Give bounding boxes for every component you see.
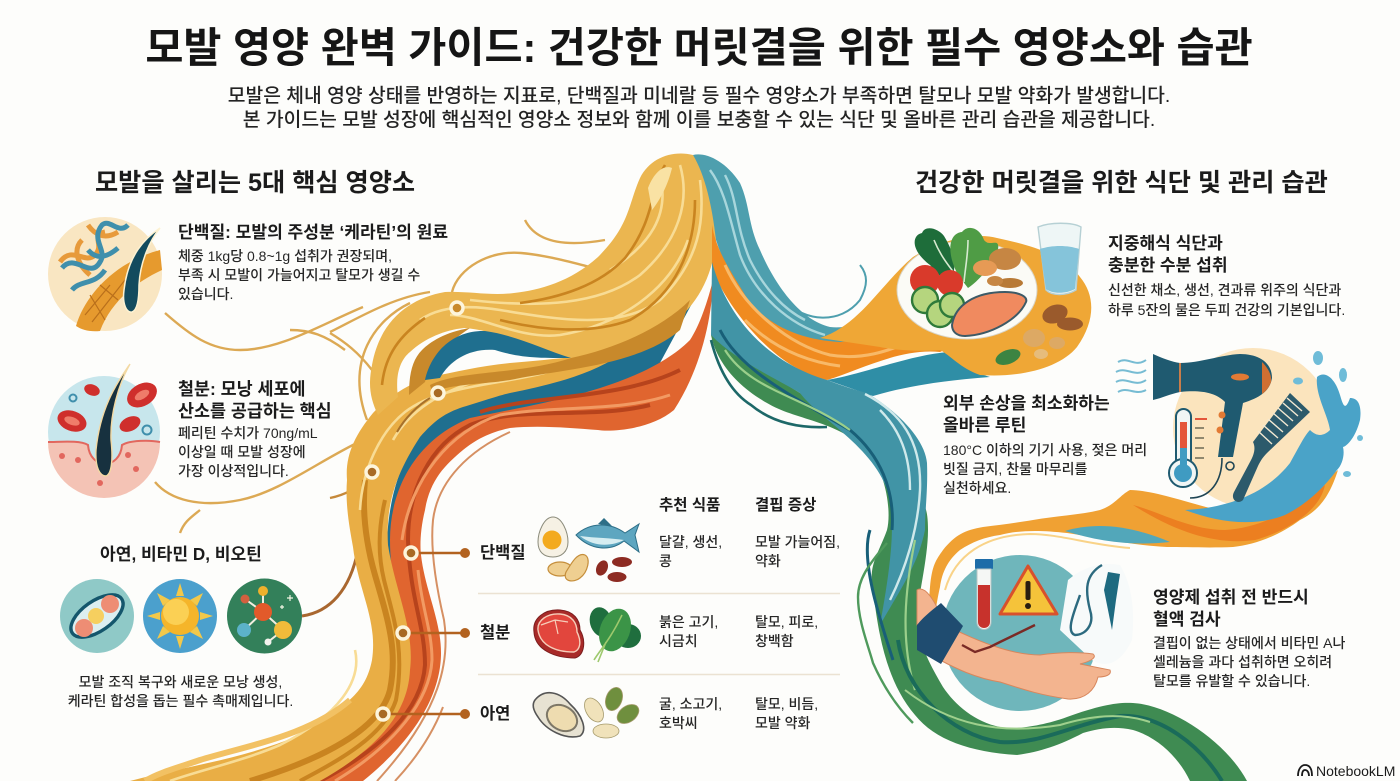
- icon: sun for vitamin D: [143, 579, 217, 653]
- table column heading: recommended foods: 추천 식품: [659, 497, 720, 514]
- zinc foods: 굴, 소고기,: [659, 696, 722, 712]
- blood test text block: [1153, 588, 1345, 689]
- icon: oyster: [533, 693, 584, 737]
- zinc, vitamin D, biotin text: [68, 674, 293, 709]
- icon: spinach: [586, 604, 641, 662]
- iron text block: 가장 이상적입니다.: [178, 463, 289, 479]
- iron text block: 페리틴 수치가 70ng/mL: [178, 425, 318, 441]
- protein foods: 달걀, 생선,: [659, 534, 722, 550]
- diet text block: 지중해식 식단과: [1108, 234, 1223, 253]
- iron foods: [659, 614, 718, 649]
- zinc, vitamin D, biotin text: 케라틴 합성을 돕는 필수 촉매제입니다.: [68, 693, 293, 709]
- iron text block: 이상일 때 모발 성장에: [178, 444, 306, 460]
- zinc symptoms: [755, 696, 818, 731]
- zinc, vitamin D, biotin text: 모발 조직 복구와 새로운 모낭 생성,: [79, 674, 282, 690]
- doctor coat: [1060, 564, 1133, 664]
- dryer: [1153, 354, 1272, 457]
- table dividers: [478, 594, 840, 674]
- cuff: [917, 603, 963, 664]
- illustration: hair dryer background circle: [1173, 348, 1333, 508]
- hair illustration: left golden and orange strands: [130, 154, 716, 781]
- icon: keratin and hair shaft: [48, 217, 162, 331]
- iron symptoms: [755, 614, 818, 649]
- care routine text block: [943, 394, 1147, 496]
- plate: [897, 241, 1037, 339]
- protein text block: 체중 1kg당 0.8~1g 섭취가 권장되며,: [178, 248, 392, 264]
- zinc symptoms: 탈모, 비듬,: [755, 696, 818, 712]
- iron symptoms: 탈모, 피로,: [755, 614, 818, 630]
- hair band arching over blood test icon: [928, 470, 1338, 612]
- care routine text block: 외부 손상을 최소화하는: [943, 394, 1110, 413]
- cucumbers: [912, 287, 964, 327]
- right section heading: 건강한 머릿결을 위한 식단 및 관리 습관: [915, 169, 1328, 197]
- iron foods: 시금치: [659, 633, 698, 649]
- scattered nuts: [993, 301, 1083, 368]
- icon: red meat: [534, 610, 584, 658]
- blood test text block: 셀레늄을 과다 섭취하면 오히려: [1153, 654, 1332, 670]
- care routine text block: 180°C 이하의 기기 사용, 젖은 머리: [943, 442, 1147, 458]
- water drops: [1293, 351, 1363, 477]
- intro text: 모발은 체내 영양 상태를 반영하는 지표로, 단백질과 미네랄 등 필수 영양소가 부족하면 탈모나 모발 약화가 발생합니다.: [228, 86, 1170, 107]
- iron foods: 붉은 고기,: [659, 614, 718, 630]
- warning triangle: [1000, 566, 1057, 614]
- NotebookLM wordmark: NotebookLM: [1316, 763, 1395, 779]
- protein foods: 콩: [659, 553, 672, 569]
- left section heading: 모발을 살리는 5대 핵심 영양소: [95, 169, 415, 197]
- icon: mitochondria for zinc: [60, 579, 134, 653]
- hair illustration: right teal, orange and green strands: [693, 154, 1247, 781]
- icon: pumpkin seeds: [581, 685, 642, 738]
- icon: egg: [538, 517, 568, 557]
- protein text block: 단백질: 모발의 주성분 ‘케라틴’의 원료: [178, 223, 448, 242]
- protein symptoms: 약화: [755, 553, 781, 569]
- zinc, vitamin D, biotin heading: 아연, 비타민 D, 비오틴: [100, 545, 262, 564]
- table column heading: deficiency symptoms: 결핍 증상: [755, 497, 816, 514]
- air lines: [1116, 360, 1146, 392]
- care routine text block: 실천하세요.: [943, 480, 1011, 496]
- table row label: zinc: 아연: [480, 705, 510, 723]
- protein text block: 있습니다.: [178, 286, 233, 302]
- table row label: protein: 단백질: [480, 544, 526, 562]
- blood test text block: 혈액 검사: [1153, 610, 1221, 629]
- protein text block: [178, 223, 448, 302]
- blood test text block: 탈모를 유발할 수 있습니다.: [1153, 673, 1310, 689]
- icon: beans: [594, 557, 632, 582]
- illustration: blood test with arm, warning sign and doctor: [917, 555, 1133, 711]
- intro text: 본 가이드는 모발 성장에 핵심적인 영양소 정보와 함께 이를 보충할 수 있는 식단 및 올바른 관리 습관을 제공합니다.: [243, 110, 1155, 131]
- illustration: hair dryer, thermometer, comb and water: [1116, 351, 1363, 522]
- diet text block: 충분한 수분 섭취: [1108, 256, 1228, 275]
- leafy greens: [915, 228, 998, 288]
- care routine text block: 올바른 루틴: [943, 416, 1026, 435]
- icon: peanuts: [548, 554, 588, 581]
- salmon: [952, 292, 1026, 336]
- syringe: [962, 625, 1035, 652]
- NotebookLM logo mark: [1298, 765, 1312, 776]
- illustration: Mediterranean meal plate and water: [897, 223, 1083, 368]
- node markers on hair: [366, 302, 470, 720]
- table row label: iron: 철분: [480, 624, 510, 642]
- protein foods: [659, 534, 722, 569]
- icon: blood cells and hair follicle: [48, 364, 161, 498]
- water splash: [1185, 374, 1361, 522]
- arm: [917, 589, 1110, 699]
- diet text block: 신선한 채소, 생선, 견과류 위주의 식단과: [1108, 282, 1341, 298]
- glass of water: [1038, 223, 1081, 294]
- care routine text block: 빗질 금지, 찬물 마무리를: [943, 461, 1087, 477]
- comb: [1233, 393, 1310, 502]
- zinc foods: [659, 696, 722, 731]
- blood test text block: 결핍이 없는 상태에서 비타민 A나: [1153, 635, 1345, 651]
- diet text block: 하루 5잔의 물은 두피 건강의 기본입니다.: [1108, 302, 1345, 318]
- zinc symptoms: 모발 약화: [755, 715, 810, 731]
- iron text block: 철분: 모낭 세포에: [178, 379, 305, 399]
- protein text block: 부족 시 모발이 가늘어지고 탈모가 생길 수: [178, 267, 420, 283]
- tomatoes: [910, 265, 963, 296]
- nuts on plate: [973, 248, 1023, 288]
- thermometer: [1169, 409, 1207, 487]
- iron text block: 산소를 공급하는 핵심: [178, 401, 332, 421]
- diet text block: [1108, 234, 1345, 318]
- protein symptoms: 모발 가늘어짐,: [755, 534, 840, 550]
- title: 모발 영양 완벽 가이드: 건강한 머릿결을 위한 필수 영양소와 습관: [145, 25, 1253, 71]
- icon: fish: [576, 518, 639, 552]
- iron text block: [178, 379, 332, 479]
- protein symptoms: [755, 534, 840, 569]
- zinc foods: 호박씨: [659, 715, 698, 731]
- icon: biotin molecule: [227, 578, 302, 654]
- blood test text block: 영양제 섭취 전 반드시: [1153, 588, 1309, 607]
- intro text: [228, 86, 1170, 131]
- iron symptoms: 창백함: [755, 633, 794, 649]
- test tube: [975, 559, 993, 630]
